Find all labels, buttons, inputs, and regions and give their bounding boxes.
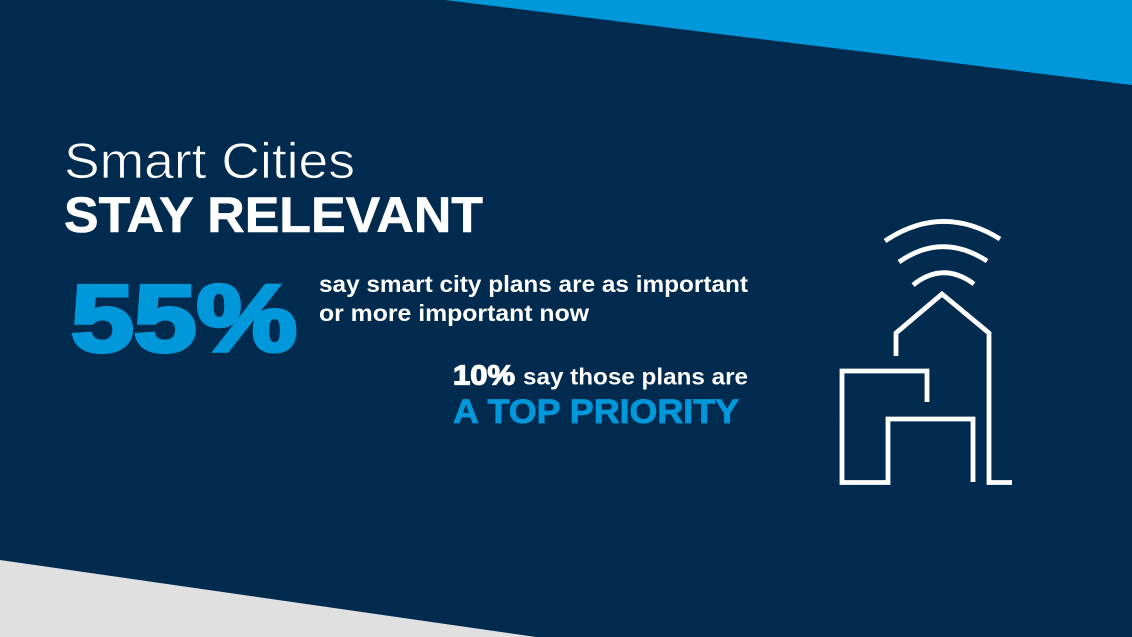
description of 55% statistic xyxy=(319,271,748,326)
secondary statistic: 10% xyxy=(453,360,748,431)
title line: STAY RELEVANT: STAY RELEVANT xyxy=(64,187,483,243)
icon: tall building xyxy=(896,294,1012,482)
description line 1: say smart city plans are as important xyxy=(319,271,748,297)
10% figure: 10% xyxy=(453,360,515,390)
title xyxy=(64,133,483,243)
icon: front buildings xyxy=(842,371,973,482)
title line: Smart Cities: Smart Cities xyxy=(64,133,355,189)
icon: connected smart buildings xyxy=(842,221,1012,482)
grey corner band xyxy=(0,560,536,637)
light blue corner band xyxy=(445,0,1132,85)
A TOP PRIORITY: A TOP PRIORITY xyxy=(453,393,739,431)
big statistic: 55%: 55% xyxy=(71,266,297,372)
icon: wifi signal arcs xyxy=(885,221,1000,285)
say those plans are: say those plans are xyxy=(523,364,748,390)
description line 2: or more important now xyxy=(319,300,589,326)
